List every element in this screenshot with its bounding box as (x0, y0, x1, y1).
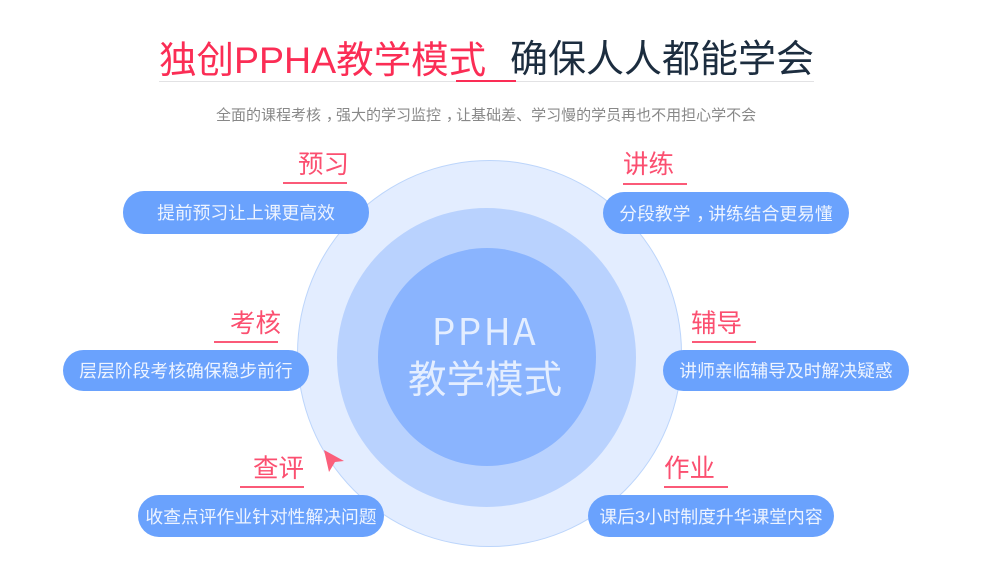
item: 考核 (63, 310, 309, 391)
pill: 收查点评作业针对性解决问题 (145, 507, 377, 527)
pill: 层层阶段考核确保稳步前行 (79, 361, 293, 381)
middle circle (337, 208, 636, 507)
pill (663, 350, 909, 391)
item: 查评 (138, 455, 384, 537)
pill (63, 350, 309, 391)
title underline (159, 81, 814, 82)
heading: 查评 (253, 455, 304, 483)
concentric circle diagram (297, 160, 682, 547)
pill: 讲师亲临辅导及时解决疑惑 (679, 361, 893, 381)
center label: 教学模式: 教学模式 (408, 359, 562, 402)
item: 辅导 (663, 310, 909, 391)
heading: 讲练 (623, 151, 674, 179)
title accent underline (456, 80, 516, 82)
outer circle (297, 160, 682, 547)
pill (588, 495, 834, 537)
pill: 课后3小时制度升华课堂内容 (599, 507, 823, 527)
subtitle: 全面的课程考核 ，强大的学习监控 ，让基础差、学习慢的学员再也不用担心学不会 (216, 107, 756, 124)
underline (240, 486, 304, 488)
underline (692, 341, 756, 343)
inner circle (378, 248, 596, 466)
title: red part: 独创PPHA教学模式 (159, 39, 486, 81)
pill: 分段教学 ，讲练结合更易懂 (619, 204, 833, 224)
item: 讲练 (603, 151, 849, 234)
underline (664, 486, 728, 488)
title (159, 39, 814, 82)
arrow (324, 450, 344, 472)
item: 预习 (123, 151, 369, 234)
underline (623, 183, 687, 185)
title: dark part: 确保人人都能学会 (510, 39, 814, 81)
heading: 预习 (298, 151, 349, 179)
heading: 考核 (230, 310, 281, 338)
heading: 辅导 (691, 310, 742, 338)
pill (138, 495, 384, 537)
underline (214, 341, 278, 343)
center label: PPHA: PPHA (432, 302, 538, 356)
underline (283, 182, 347, 184)
item: 作业 (588, 455, 834, 537)
pill: 提前预习让上课更高效 (157, 203, 335, 223)
pill (123, 191, 369, 234)
heading: 作业 (664, 455, 715, 483)
pill (603, 192, 849, 234)
